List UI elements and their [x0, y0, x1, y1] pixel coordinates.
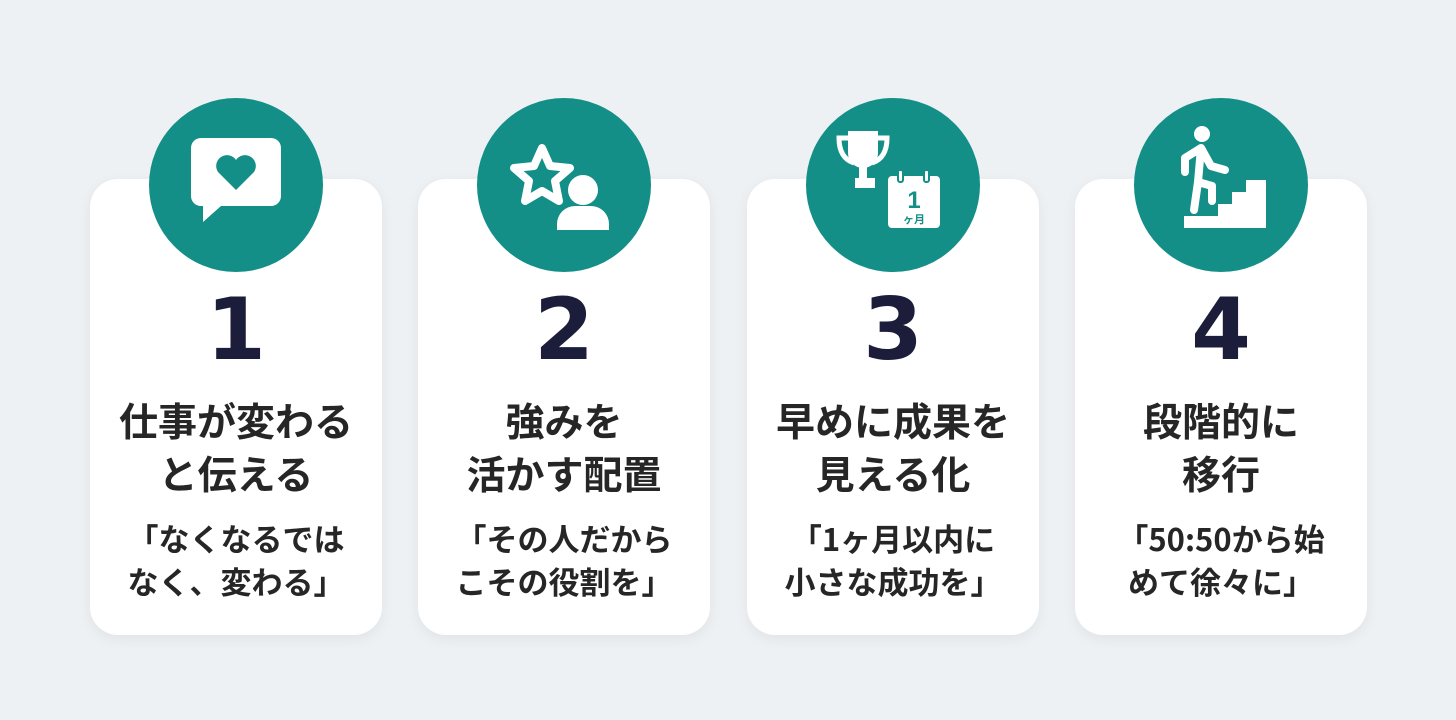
card 3	[747, 179, 1039, 635]
title 1: と伝える	[159, 445, 313, 501]
icon: star and person	[477, 98, 651, 272]
subtitle 3: 小さな成功を」	[784, 558, 1002, 603]
title 2: 活かす配置	[466, 445, 662, 501]
title 1: 仕事が変わる	[119, 392, 353, 448]
number 2: 2	[534, 280, 594, 380]
subtitle 3	[784, 515, 1002, 603]
subtitle 4: 「50:50から始	[1117, 515, 1325, 560]
subtitle 1: 「なくなるでは	[128, 515, 344, 560]
subtitle 2: こその役割を」	[456, 558, 672, 603]
subtitle 1	[128, 515, 344, 603]
title 4: 移行	[1182, 445, 1260, 501]
card 4	[1075, 179, 1367, 635]
title 4	[1143, 392, 1299, 501]
icon: trophy and calendar: ヶ月	[903, 211, 925, 227]
title 2	[466, 392, 662, 501]
icon: person climbing stairs	[1134, 98, 1308, 272]
title 3: 早めに成果を	[776, 392, 1010, 448]
subtitle 2: 「その人だから	[456, 515, 672, 560]
title 2: 強みを	[505, 392, 622, 448]
title 1	[119, 392, 353, 501]
title 3	[776, 392, 1010, 501]
subtitle 2	[456, 515, 672, 603]
icon: trophy and calendar: 1	[907, 187, 921, 214]
subtitle 4	[1117, 515, 1325, 603]
icon: heart speech bubble	[149, 98, 323, 272]
subtitle 1: なく、変わる」	[128, 558, 344, 603]
title 4: 段階的に	[1143, 392, 1299, 448]
number 4: 4	[1191, 280, 1251, 380]
number 3: 3	[863, 280, 923, 380]
number 1: 1	[206, 280, 266, 380]
card 1	[90, 179, 382, 635]
subtitle 4: めて徐々に」	[1128, 558, 1314, 603]
card 2	[418, 179, 710, 635]
icon: trophy and calendar	[806, 98, 980, 272]
title 3: 見える化	[816, 445, 970, 501]
subtitle 3: 「1ヶ月以内に	[791, 515, 995, 560]
